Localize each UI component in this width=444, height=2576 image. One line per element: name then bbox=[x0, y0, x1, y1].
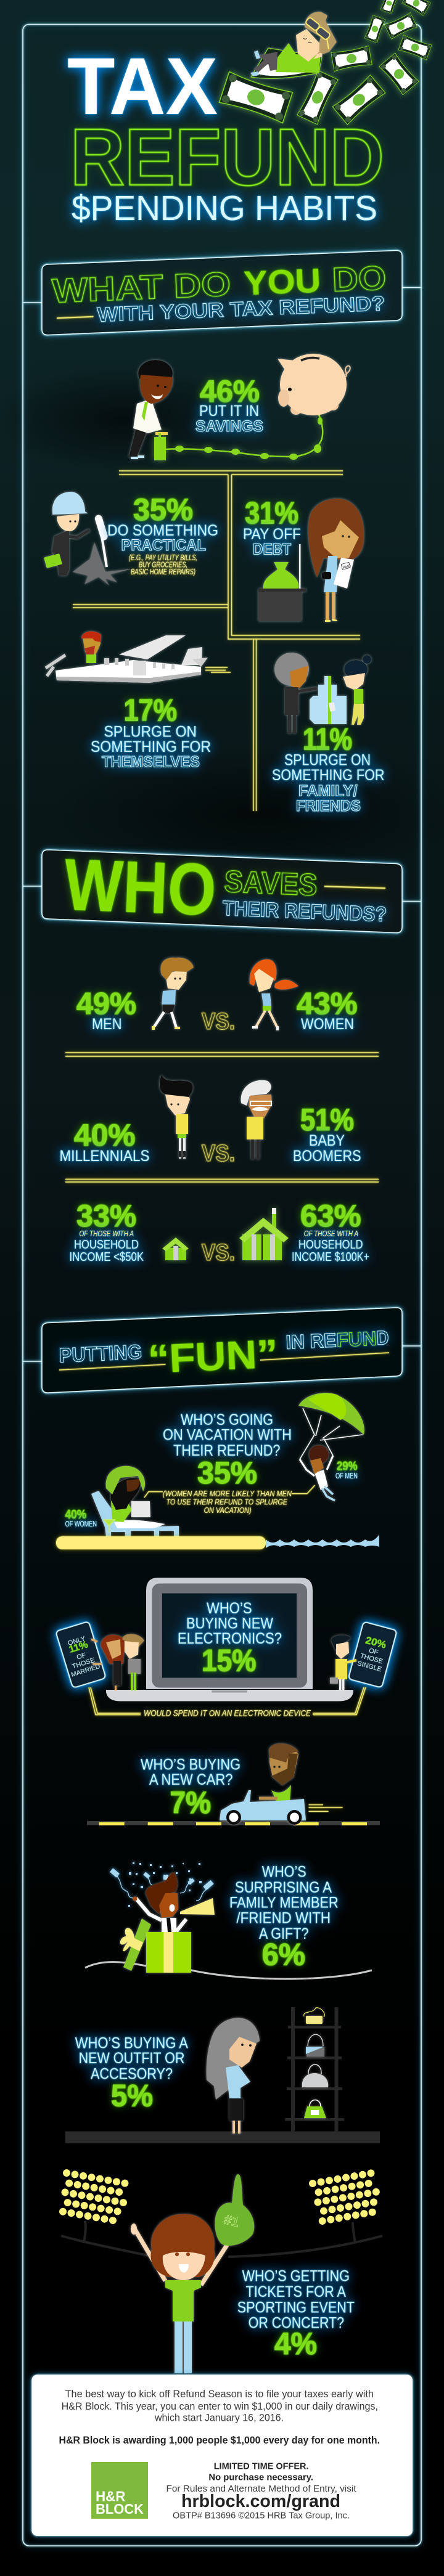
connector lines bbox=[144, 1485, 315, 1498]
note text: (WOMEN ARE MORE LIKELY THAN MEN bbox=[163, 1489, 292, 1498]
vs label: VS. bbox=[202, 1240, 235, 1266]
illustration: man bursting from gift box bbox=[120, 1872, 215, 1973]
stat text: 6% bbox=[262, 1937, 305, 1971]
label: under 50k bbox=[69, 1229, 144, 1264]
stat text: 35% bbox=[197, 1456, 257, 1490]
note text: ON VACATION) bbox=[204, 1506, 252, 1515]
speed lines bbox=[205, 667, 231, 672]
illustration: woman with paid bill bbox=[308, 499, 364, 622]
stat text: 15% bbox=[202, 1644, 257, 1678]
stat label: FRIENDS bbox=[296, 797, 361, 815]
section banner: what do you do bbox=[23, 250, 421, 335]
illustration: baby boomer man bbox=[241, 1080, 272, 1159]
promo headline: H&R Block is awarding 1,000 people $1,000 every day for one month. bbox=[59, 2435, 380, 2446]
illustration: piggy bank bbox=[278, 354, 350, 415]
stat label bbox=[243, 526, 301, 558]
stat: 17% splurge on themselves bbox=[46, 631, 231, 771]
stat: 11% splurge on family and friends bbox=[272, 653, 385, 815]
illustration: married couple bbox=[91, 1634, 144, 1690]
question text bbox=[178, 1600, 282, 1647]
question text: ON VACATION WITH bbox=[163, 1427, 292, 1444]
question text: A GIFT? bbox=[259, 1925, 308, 1942]
label: millennials: MILLENNIALS bbox=[59, 1147, 149, 1165]
stat text: 46% bbox=[200, 374, 260, 409]
illustration: millennial man bbox=[160, 1075, 193, 1159]
question text bbox=[163, 1411, 292, 1459]
logo: h&r block: H&R bbox=[96, 2488, 126, 2505]
stat label: SAVINGS bbox=[195, 418, 263, 435]
stat text: 31% bbox=[245, 495, 298, 530]
section banner: putting fun in refund bbox=[23, 1308, 421, 1393]
promo copy: The best way to kick off Refund Season is to file your taxes early with bbox=[65, 2389, 374, 2400]
offer terms bbox=[166, 2461, 356, 2521]
illustration: thoughtful woman bbox=[207, 2018, 260, 2134]
label: women: OF WOMEN bbox=[65, 1519, 97, 1528]
stat: millennials: 40% bbox=[74, 1118, 136, 1152]
stat: over 100k: 63% bbox=[300, 1199, 361, 1233]
phone: married stat: THOSE bbox=[72, 1657, 96, 1671]
title word: spending habits: $PENDING HABITS bbox=[72, 189, 377, 228]
label: under 50k: INCOME <$50K bbox=[69, 1250, 144, 1264]
stat text: 4% bbox=[274, 2326, 317, 2361]
vs label: VS. bbox=[202, 1141, 235, 1167]
phone: married stat: ONLY bbox=[67, 1635, 87, 1647]
illustration: couple with wrapped gift bbox=[274, 653, 371, 733]
stat text: 35% bbox=[133, 492, 193, 527]
stat label bbox=[91, 723, 211, 771]
stat label: SPLURGE ON bbox=[284, 752, 371, 769]
question text: WHO’S GETTING bbox=[242, 2268, 350, 2285]
question text: SPORTING EVENT bbox=[237, 2299, 355, 2316]
divider lines bbox=[65, 1180, 379, 1182]
stat: 46% savings bbox=[129, 354, 350, 460]
illustration: stadium floodlights bbox=[56, 2169, 384, 2257]
illustration: man flying private plane bbox=[46, 631, 208, 683]
label: over 100k: HOUSEHOLD bbox=[298, 1238, 363, 1252]
label: women: WOMEN bbox=[301, 1016, 354, 1033]
question text: NEW OUTFIT OR bbox=[79, 2050, 184, 2067]
question text: A NEW CAR? bbox=[149, 1771, 232, 1788]
label: over 100k: INCOME $100K+ bbox=[292, 1250, 369, 1264]
stat: women: 43% bbox=[297, 986, 358, 1021]
note text: TO USE THEIR REFUND TO SPLURGE bbox=[166, 1498, 287, 1506]
banner words: in refund bbox=[286, 1326, 389, 1353]
stat label bbox=[107, 522, 218, 554]
section: gift surprise bbox=[85, 1862, 372, 1979]
phone: married stat: MARRIED bbox=[70, 1663, 101, 1679]
section banner: who saves their refunds bbox=[23, 844, 421, 933]
stat label: FAMILY/ bbox=[298, 783, 358, 800]
section: vacation bbox=[56, 1393, 379, 1549]
banner word: fun: “FUN” bbox=[147, 1331, 279, 1382]
stat label: PUT IT IN bbox=[199, 402, 259, 420]
phone: single stat: OF bbox=[368, 1647, 379, 1657]
question text: TICKETS FOR A bbox=[245, 2283, 346, 2301]
question text: WHO’S BUYING bbox=[141, 1756, 240, 1773]
stat label: SOMETHING FOR bbox=[272, 767, 385, 784]
illustration: woman running bbox=[250, 960, 298, 1030]
question text: ACCESORY? bbox=[91, 2066, 173, 2083]
question text: /FRIEND WITH bbox=[236, 1909, 331, 1926]
underline accent bbox=[57, 317, 94, 318]
banner subheading: THEIR REFUNDS? bbox=[222, 897, 387, 926]
confetti and streamers bbox=[110, 1862, 214, 1907]
banner words: in refund: IN RE bbox=[286, 1329, 337, 1353]
vs label: VS. bbox=[202, 1009, 235, 1035]
section: outfit and accessories bbox=[65, 2007, 380, 2143]
label: over 100k bbox=[292, 1229, 369, 1264]
offer terms: OBTP# B13696 ©2015 HRB Tax Group, Inc. bbox=[173, 2510, 350, 2521]
label: men: OF MEN bbox=[335, 1471, 358, 1480]
question text bbox=[141, 1756, 240, 1788]
phone: married stat: 11% bbox=[68, 1639, 89, 1655]
illustration: man with pump bbox=[129, 360, 173, 459]
icon: large money house bbox=[239, 1208, 289, 1260]
title word: refund: REFUND bbox=[70, 112, 384, 202]
banner heading: YOU bbox=[243, 261, 321, 303]
label: baby boomers: BOOMERS bbox=[293, 1147, 361, 1165]
examples note: BUY GROCERIES, bbox=[139, 560, 187, 569]
comparison: men vs women bbox=[76, 958, 358, 1035]
speed lines bbox=[308, 1805, 343, 1811]
stat label: PAY OFF bbox=[243, 526, 301, 543]
stat: women: 40% bbox=[65, 1508, 86, 1522]
question text bbox=[229, 1864, 339, 1942]
question text: WHO’S GOING bbox=[181, 1411, 273, 1429]
connector lines bbox=[89, 1687, 366, 1714]
question text: SURPRISING A bbox=[235, 1879, 332, 1896]
section: electronics bbox=[56, 1578, 397, 1718]
illustration: man driving convertible bbox=[220, 1743, 306, 1825]
promo copy: which start January 16, 2016. bbox=[154, 2412, 284, 2423]
illustration: fan with foam finger: #1 bbox=[223, 2212, 240, 2230]
underline accents bbox=[59, 1353, 389, 1370]
question text: WHO’S bbox=[207, 1600, 252, 1617]
stat label bbox=[272, 752, 385, 815]
banner frame bbox=[23, 250, 421, 335]
section: new car bbox=[87, 1743, 380, 1825]
panel background bbox=[31, 2374, 413, 2536]
question text: THEIR REFUND? bbox=[173, 1442, 280, 1459]
promo copy bbox=[62, 2389, 378, 2423]
sand bar bbox=[56, 1536, 266, 1549]
label: baby boomers: BABY bbox=[309, 1132, 345, 1149]
question text: BUYING NEW bbox=[186, 1615, 273, 1632]
banner words: in refund: FUN bbox=[336, 1327, 377, 1351]
question text bbox=[237, 2268, 355, 2332]
banner heading: DO bbox=[331, 258, 387, 299]
phone: single stat bbox=[348, 1621, 397, 1688]
illustration: handbags bbox=[302, 2008, 328, 2118]
note text bbox=[163, 1489, 292, 1515]
phone: single stat: 20% bbox=[364, 1634, 387, 1651]
icon: small money house bbox=[162, 1237, 189, 1260]
illustration: woman on sun lounger bbox=[91, 1466, 179, 1537]
promo panel bbox=[31, 2374, 413, 2536]
floor bbox=[65, 2131, 380, 2143]
offer terms: hrblock.com/grand bbox=[181, 2492, 340, 2511]
illustration: worker with screwdriver bbox=[44, 492, 133, 585]
stat label: DO SOMETHING bbox=[107, 522, 218, 539]
question text: ELECTRONICS? bbox=[178, 1630, 282, 1647]
banner subheading: WITH YOUR TAX REFUND? bbox=[97, 291, 385, 326]
banner heading: saves: SAVES bbox=[224, 864, 318, 902]
label: men: MEN bbox=[92, 1016, 122, 1033]
stat text: 7% bbox=[170, 1785, 211, 1820]
logo: h&r block bbox=[91, 2462, 148, 2519]
wavy ground line bbox=[85, 1962, 372, 1979]
label: under 50k: HOUSEHOLD bbox=[74, 1238, 139, 1252]
stat text: 17% bbox=[124, 693, 177, 728]
phone: married stat bbox=[56, 1621, 106, 1688]
label: over 100k: OF THOSE WITH A bbox=[304, 1229, 358, 1238]
offer terms: LIMITED TIME OFFER. bbox=[214, 2461, 308, 2471]
banner heading: WHAT DO bbox=[51, 264, 231, 310]
phone: single stat: THOSE bbox=[360, 1652, 384, 1665]
offer terms: No purchase necessary. bbox=[208, 2472, 313, 2483]
question text: WHO’S bbox=[262, 1864, 306, 1881]
underline accent bbox=[324, 886, 385, 889]
illustration: fan with foam finger bbox=[131, 2174, 254, 2373]
stat: 31% pay off debt bbox=[243, 495, 364, 622]
banner heading bbox=[51, 258, 387, 310]
label: baby boomers bbox=[293, 1132, 361, 1165]
stat label: DEBT bbox=[253, 541, 291, 558]
water waves bbox=[266, 1535, 379, 1548]
title bbox=[67, 41, 384, 228]
illustration: laptop bbox=[106, 1578, 353, 1701]
phone: single stat: SINGLE bbox=[356, 1660, 382, 1673]
stat text: 5% bbox=[111, 2078, 153, 2113]
title word: tax: TAX bbox=[67, 41, 218, 131]
banner word: putting: PUTTING bbox=[59, 1340, 142, 1367]
stat label: SOMETHING FOR bbox=[91, 738, 211, 756]
question text bbox=[75, 2035, 188, 2083]
road bbox=[87, 1821, 380, 1825]
examples note: (E.G., PAY UTILITY BILLS, bbox=[129, 553, 197, 562]
banner frame bbox=[23, 1308, 421, 1393]
divider lines bbox=[65, 1053, 379, 1056]
illustration: man relaxing on a bill hammock bbox=[250, 12, 337, 78]
caption: WOULD SPEND IT ON AN ELECTRONIC DEVICE bbox=[144, 1708, 311, 1718]
illustration: man parachuting bbox=[298, 1393, 364, 1501]
banner frame bbox=[23, 850, 421, 933]
section: sporting event tickets bbox=[56, 2169, 384, 2373]
comparison: household income bbox=[69, 1199, 369, 1266]
illustration: man running bbox=[152, 958, 194, 1030]
examples note bbox=[129, 553, 197, 576]
question text: WHO’S BUYING A bbox=[75, 2035, 188, 2052]
illustration: shelf bbox=[285, 2007, 344, 2132]
promo copy: H&R Block. This year, you can enter to win $1,000 in our daily drawings, bbox=[62, 2401, 378, 2412]
stat text: 11% bbox=[303, 722, 352, 757]
examples note: BASIC HOME REPAIRS) bbox=[131, 567, 195, 576]
banner heading: who: WHO bbox=[63, 844, 218, 931]
label: under 50k: OF THOSE WITH A bbox=[79, 1229, 134, 1238]
illustration: pump and hose bbox=[154, 410, 323, 460]
stat: men: 49% bbox=[76, 986, 136, 1021]
phone: married stat: OF bbox=[76, 1652, 87, 1661]
connector lines: what people do tree bbox=[73, 471, 360, 811]
stat label: THEMSELVES bbox=[102, 754, 200, 771]
stat: men: 29% bbox=[337, 1460, 358, 1473]
stat label: PRACTICAL bbox=[121, 537, 206, 554]
stat label: SPLURGE ON bbox=[104, 723, 197, 741]
stat: 35% practical bbox=[44, 492, 218, 585]
illustration: falling cash bills bbox=[220, 0, 432, 124]
illustration: woman with paid bill: PAID bbox=[342, 565, 352, 570]
question text: FAMILY MEMBER bbox=[229, 1894, 339, 1912]
logo: h&r block: BLOCK bbox=[96, 2501, 144, 2517]
offer terms: For Rules and Alternate Method of Entry, visit bbox=[166, 2484, 356, 2494]
illustration: single man bbox=[330, 1635, 356, 1690]
stat: baby boomers: 51% bbox=[300, 1103, 354, 1137]
banner words: in refund: D bbox=[376, 1326, 389, 1349]
question text: OR CONCERT? bbox=[249, 2315, 344, 2332]
illustration: money bag and deposit box bbox=[258, 544, 306, 621]
stat: under 50k: 33% bbox=[76, 1199, 136, 1233]
comparison: millennials vs baby boomers bbox=[59, 1075, 361, 1167]
stat label bbox=[195, 402, 263, 435]
